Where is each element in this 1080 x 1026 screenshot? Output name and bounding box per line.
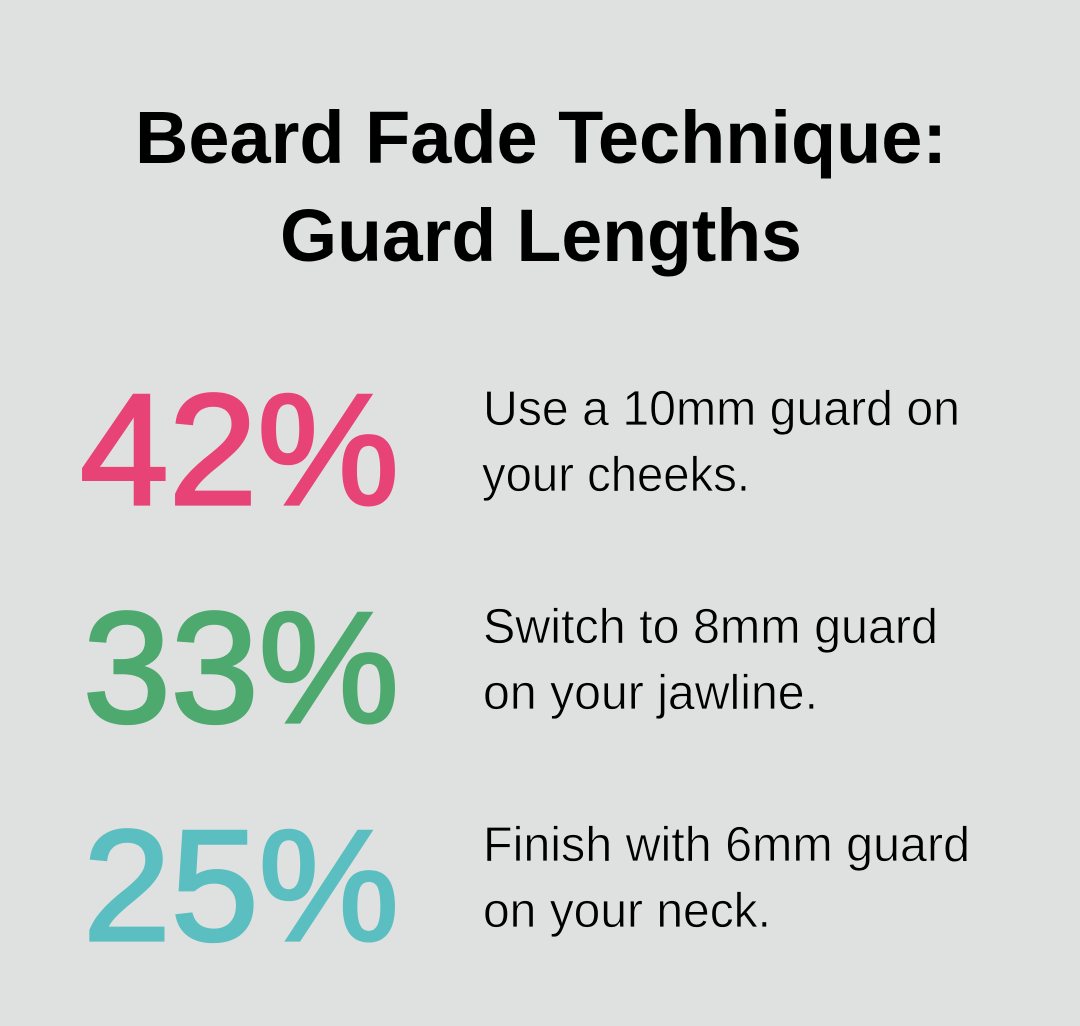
description: neck: on your neck. (483, 884, 771, 938)
description: jawline: Switch to 8mm guard (483, 600, 938, 654)
title: Beard Fade Technique: (135, 96, 947, 179)
stat row: 33% jawline (83, 580, 938, 756)
stat row: 42% cheeks (80, 362, 960, 538)
description: jawline (483, 600, 938, 720)
stat row: 25% neck (83, 798, 970, 974)
description: cheeks: Use a 10mm guard on (483, 382, 960, 436)
description: cheeks (482, 382, 960, 502)
description: neck: Finish with 6mm guard (483, 818, 970, 872)
title: Guard Lengths (280, 194, 802, 277)
stat number: 33%: 33% (83, 580, 399, 756)
description: cheeks: your cheeks. (482, 448, 750, 502)
stat number: 25%: 25% (83, 798, 399, 974)
description: jawline: on your jawline. (483, 666, 818, 720)
description: neck (483, 818, 970, 938)
stat number: 42%: 42% (80, 362, 399, 538)
title (135, 96, 947, 277)
